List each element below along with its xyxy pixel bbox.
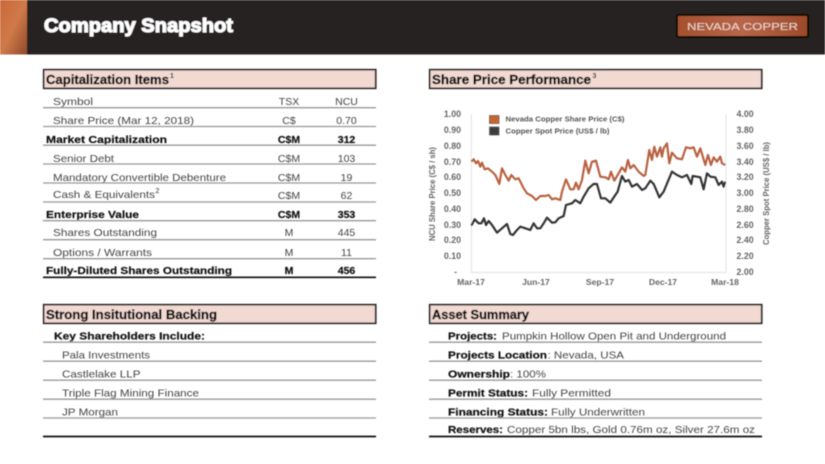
row: shares outstanding: Shares Outstanding [53,227,157,239]
row: reserves: Reserves: [448,424,503,436]
row: projects: Pumpkin Hollow Open Pit and Underground [502,330,726,342]
row: share price: C$ [282,115,296,127]
row: reserves: Copper 5bn lbs, Gold 0.76m oz, Silver 27.6m oz [507,424,755,436]
left axis labels: 0.30 [444,220,461,230]
title: Company Snapshot [44,16,234,37]
row: projects location [429,350,762,362]
heading: share price performance: 3 [592,73,596,80]
row: symbol: TSX [279,96,299,108]
legend [490,114,625,136]
right axis title: Copper Spot Price (US$ / lb) [761,142,771,245]
row: enterprise value: Enterprise Value [46,209,139,221]
heading: share price performance [430,70,762,88]
right axis labels: 2.00 [736,267,754,277]
row: permit status: Permit Status: [448,388,528,400]
heading: share price performance: Share Price Performance [432,73,591,87]
row: Castlelake LLP: Castlelake LLP [62,368,140,380]
row: share price: Share Price (Mar 12, 2018) [53,115,194,127]
heading: institutional backing [44,305,376,323]
row: senior debt: 103 [338,153,355,165]
row: projects location: Projects Location [448,350,547,362]
heading: institutional backing: Strong Insitutional Backing [46,308,217,322]
row: fully-diluted shares [43,265,376,277]
x axis labels: Dec-17 [649,277,677,287]
left axis labels: 0.20 [444,235,461,245]
right axis labels: 4.00 [736,109,754,119]
heading: capitalization items: Capitalization Items [46,73,169,87]
panel: capitalization items [43,70,376,277]
row: projects location: : Nevada, USA [548,350,624,362]
row: market capitalization: 312 [338,134,355,146]
left axis labels [444,109,461,277]
row: reserves [429,424,762,436]
x axis labels: Mar-17 [457,277,485,287]
row: permit status [429,388,762,400]
row: enterprise value: 353 [338,209,355,221]
row: senior debt [43,153,376,165]
row: financing status: Fully Underwritten [551,406,645,418]
row: market capitalization: Market Capitalization [46,134,167,146]
row: cash and equivalents [43,188,376,202]
row: options and warrants [43,247,376,259]
right axis labels: 2.40 [736,235,754,245]
row: convertible debenture: C$M [278,172,300,184]
row: enterprise value: C$M [278,209,300,221]
row: fully-diluted shares: Fully-Diluted Shares Outstanding [46,265,232,277]
row: convertible debenture [43,172,376,184]
row: projects: Projects: [448,330,497,342]
line chart [427,109,771,287]
row: enterprise value [43,209,376,221]
row: cash and equivalents: Cash & Equivalents [53,189,155,201]
row: Triple Flag Mining Finance: Triple Flag Mining Finance [62,388,199,400]
x axis labels [457,277,739,287]
panel: asset summary [429,305,762,436]
left axis labels: 0.50 [444,188,461,198]
right axis labels: 3.20 [736,172,754,182]
legend: Copper Spot Price (US$ / lb) [506,126,610,136]
row: options and warrants: M [285,247,293,259]
row: share price [43,115,376,127]
heading: capitalization items: 1 [170,73,174,80]
right axis labels [736,109,754,277]
left axis labels: 0.70 [444,157,461,167]
row: fully-diluted shares: 456 [338,265,355,277]
left axis labels: 0.60 [444,172,461,182]
legend: Nevada Copper Share Price (C$) [506,114,625,124]
right axis labels: 3.00 [736,188,754,198]
row: share price: 0.70 [336,115,357,127]
row: Pala Investments: Pala Investments [62,350,150,362]
right axis labels: 2.80 [736,204,754,214]
heading: asset summary [430,305,762,323]
row: JP Morgan: JP Morgan [62,406,118,418]
row: options and warrants: 11 [341,247,352,259]
right axis labels: 3.40 [736,157,754,167]
row: convertible debenture: Mandatory Convertible Debenture [53,172,226,184]
row: shares outstanding: 445 [338,227,355,239]
left axis labels: 0.40 [444,204,461,214]
row: financing status [429,406,762,418]
row: shares outstanding [43,227,376,240]
right axis labels: 3.80 [736,125,754,135]
row: financing status: Financing Status: [448,406,548,418]
x axis labels: Sep-17 [586,277,614,287]
row: market capitalization [43,134,376,146]
row: shares outstanding: M [285,227,293,239]
left axis labels: 1.00 [444,109,461,119]
row: senior debt: Senior Debt [53,153,114,165]
x axis labels: Jun-17 [522,277,550,287]
left axis title: NCU Share Price (C$ / sh) [427,147,437,241]
row: symbol: Symbol [53,96,93,108]
x axis labels: Mar-18 [711,277,739,287]
left axis labels: - [454,267,457,277]
chart axes [471,114,726,272]
row: convertible debenture: 19 [341,172,352,184]
header band [0,0,825,54]
row: symbol: NCU [335,96,358,108]
logo: Nevada Copper [677,15,808,37]
row: permit status: Fully Permitted [532,388,611,400]
row: market capitalization: C$M [278,134,300,146]
row: symbol [43,96,376,108]
row: projects [429,330,762,342]
row: cash and equivalents: 2 [156,188,160,195]
left axis labels: 0.10 [444,251,461,261]
panel: share price performance [427,70,771,287]
row: options and warrants: Options / Warrants [53,247,152,259]
heading: capitalization items [44,70,376,88]
series: Nevada Copper share price [471,143,725,200]
panel: institutional backing [43,305,376,436]
right axis labels: 2.60 [736,220,754,230]
row: ownership: : 100% [510,368,546,380]
row: key shareholders: Key Shareholders Include: [54,330,205,342]
row: cash and equivalents: 62 [341,190,352,202]
row: ownership [429,368,762,380]
left axis labels: 0.80 [444,141,461,151]
right axis labels: 2.20 [736,251,754,261]
row: cash and equivalents: C$M [278,190,300,202]
row: ownership: Ownership [448,368,510,380]
row: senior debt: C$M [278,153,300,165]
left axis labels: 0.90 [444,125,461,135]
logo: Nevada Copper: NEVADA COPPER [687,21,799,33]
row: fully-diluted shares: M [285,265,294,277]
right axis labels: 3.60 [736,141,754,151]
series: copper spot price [471,172,725,235]
heading: asset summary: Asset Summary [432,308,529,322]
